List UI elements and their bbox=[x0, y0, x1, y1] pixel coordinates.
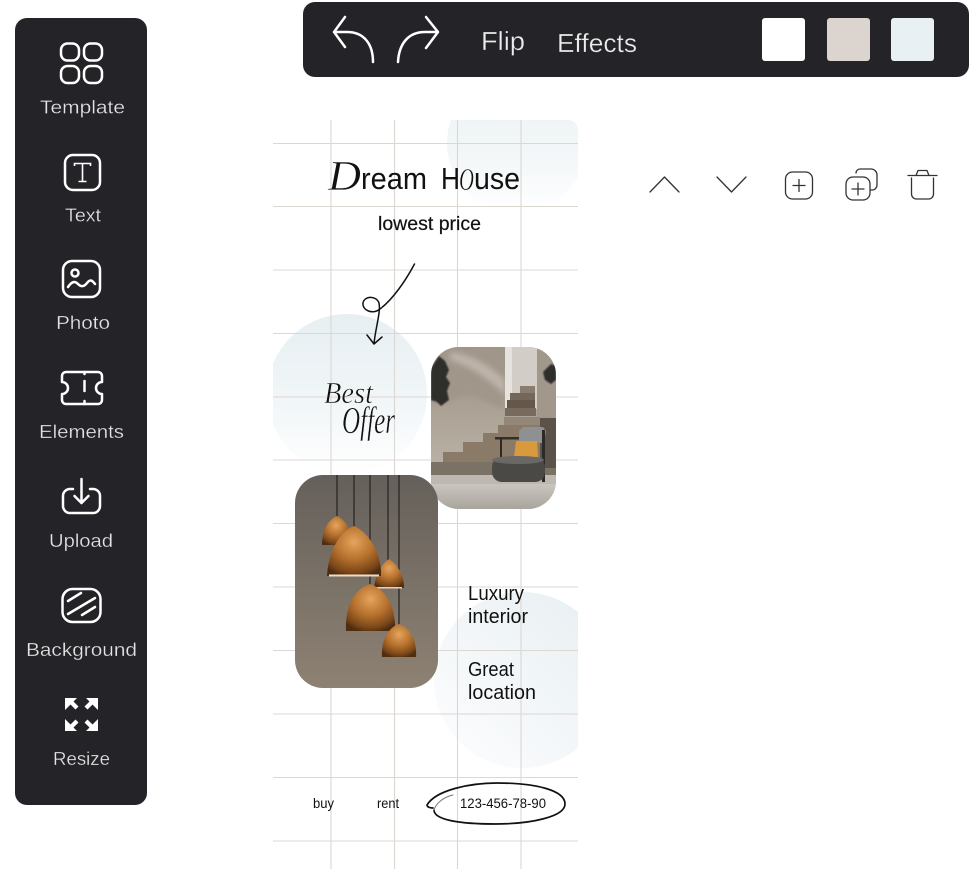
top toolbar panel bbox=[303, 2, 969, 77]
layer action icons bbox=[650, 169, 937, 200]
tool: Text bbox=[65, 155, 101, 226]
feature text: Great location: location bbox=[468, 682, 536, 704]
footer label: buy: buy bbox=[313, 796, 334, 811]
tool: Photo: Photo bbox=[56, 313, 110, 333]
title: Dream House: H bbox=[441, 161, 460, 196]
feature text: Great location: Great bbox=[468, 659, 514, 681]
swatch: beige bbox=[827, 18, 870, 61]
footer phone number: 123-456-78-90 bbox=[460, 796, 546, 811]
poster background circles bbox=[273, 120, 578, 766]
title: Dream House: D bbox=[327, 154, 361, 200]
tool: Template bbox=[40, 44, 125, 118]
icon: duplicate page bbox=[846, 169, 877, 200]
tool: Elements bbox=[39, 372, 124, 442]
icon: undo arrow bbox=[334, 17, 373, 62]
icon: redo arrow bbox=[398, 17, 438, 62]
footer label: rent: rent bbox=[377, 796, 399, 811]
photo: copper pendant lamps bbox=[295, 475, 438, 688]
subtitle: lowest price: lowest price bbox=[378, 214, 481, 235]
tool: Upload bbox=[49, 479, 113, 551]
tool: Elements: Elements bbox=[39, 422, 124, 442]
script text: Best Offer: Offer bbox=[342, 400, 395, 442]
script text: Best Offer: Best bbox=[324, 375, 374, 410]
tool: Photo bbox=[56, 261, 110, 333]
tool: Template: Template bbox=[40, 98, 125, 118]
tool: Upload: Upload bbox=[49, 531, 113, 551]
feature text: Luxury interior: interior bbox=[468, 606, 528, 628]
feature text: Luxury interior: Luxury bbox=[468, 583, 524, 605]
title: Dream House: O bbox=[459, 161, 474, 197]
photo: staircase interior bbox=[431, 347, 556, 509]
tool: Background bbox=[26, 589, 137, 660]
title: Dream House bbox=[327, 154, 520, 200]
swatch: pale blue bbox=[891, 18, 934, 61]
label: Effects: Effects bbox=[557, 28, 637, 58]
left sidebar panel bbox=[15, 18, 147, 805]
feature text: Great location bbox=[468, 659, 536, 704]
label: Flip: Flip bbox=[481, 26, 525, 56]
hand-drawn ellipse around phone bbox=[427, 783, 565, 824]
icon: move up bbox=[650, 177, 679, 192]
icon: move down bbox=[717, 177, 746, 192]
hand-drawn arrow bbox=[363, 264, 414, 344]
tool: Background: Background bbox=[26, 640, 137, 660]
icon: trash bbox=[908, 170, 937, 199]
tool: Resize: Resize bbox=[53, 749, 110, 769]
tool: Resize bbox=[53, 698, 110, 769]
title: Dream House: ream bbox=[361, 161, 427, 196]
swatch: white bbox=[762, 18, 805, 61]
script text: Best Offer bbox=[324, 375, 395, 442]
feature text: Luxury interior bbox=[468, 583, 528, 628]
title: Dream House: use bbox=[474, 161, 520, 196]
tool: Text: Text bbox=[65, 206, 101, 226]
icon: add page bbox=[786, 172, 812, 199]
